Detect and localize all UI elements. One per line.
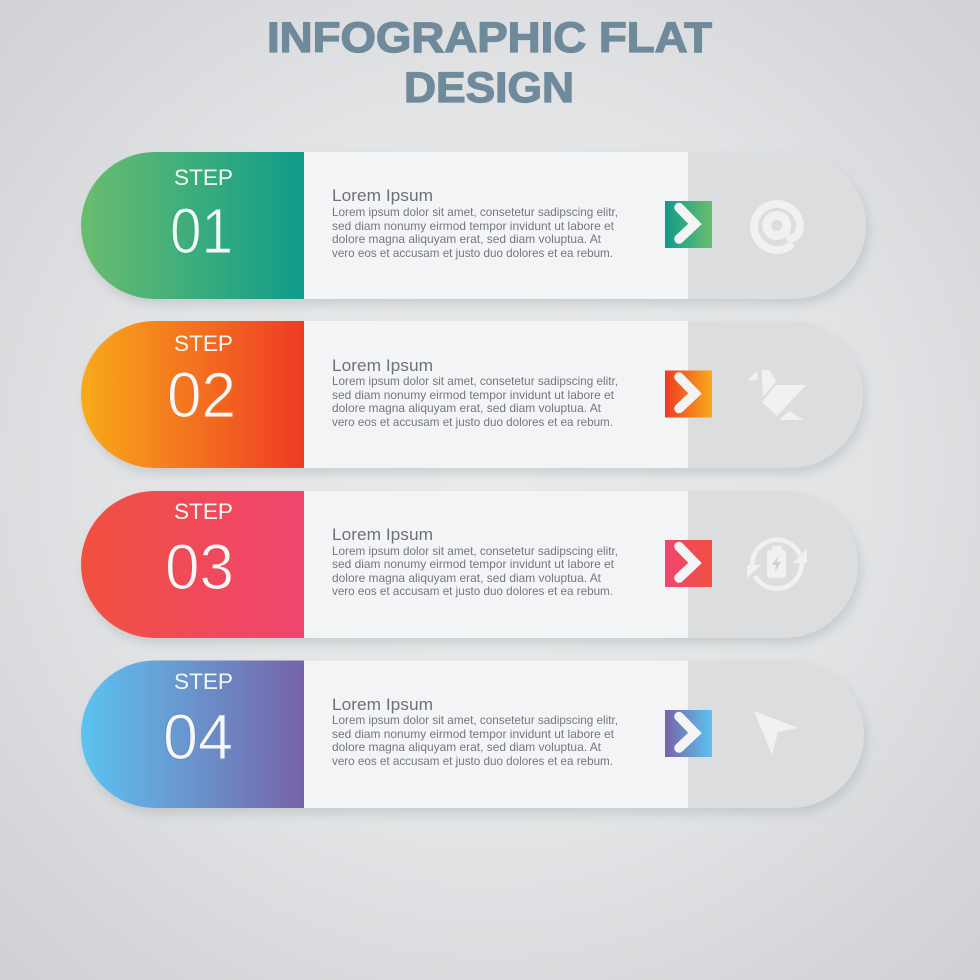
text block 03: Lorem ipsum dolor sit amet, consetetur sadipscing elitr, [332, 544, 618, 558]
panel: step 01 [81, 152, 866, 299]
colour tab 02 [81, 321, 304, 468]
text panel 01 [304, 152, 688, 299]
text block 04: Lorem ipsum dolor sit amet, consetetur sadipscing elitr, [332, 713, 618, 727]
text block 04: vero eos et accusam et justo duo dolores et ea rebum. [332, 754, 613, 768]
step label 02: STEP [174, 331, 233, 356]
colour tab 03 [81, 491, 304, 638]
colour tab 01 [81, 152, 304, 299]
title [267, 14, 712, 112]
text block 01: dolore magna aliquyam erat, sed diam voluptua. At [332, 232, 602, 246]
text block 02: Lorem ipsum dolor sit amet, consetetur sadipscing elitr, [332, 374, 618, 388]
text block 01: Lorem ipsum dolor sit amet, consetetur sadipscing elitr, [332, 205, 618, 219]
text block 02 [332, 356, 618, 429]
panel: step 02 [81, 321, 863, 468]
text block 02: sed diam nonumy eirmod tempor invidunt ut labore et [332, 388, 615, 402]
step number 01: 01 [170, 195, 233, 267]
text panel 03 [304, 491, 688, 638]
text block 03: dolore magna aliquyam erat, sed diam voluptua. At [332, 571, 602, 585]
step number 04: 04 [163, 701, 233, 773]
step number 03: 03 [165, 531, 234, 603]
text block 02: vero eos et accusam et justo duo dolores et ea rebum. [332, 415, 613, 429]
text block 02: Lorem Ipsum [332, 356, 433, 375]
text block 03: sed diam nonumy eirmod tempor invidunt ut labore et [332, 557, 615, 571]
panel: step 03 [81, 491, 858, 638]
colour tab 04 [81, 660, 304, 808]
icon: at sign [754, 204, 800, 250]
pill body 03 [81, 491, 858, 638]
text block 03: Lorem Ipsum [332, 525, 433, 544]
text panel 04 [304, 660, 688, 808]
icon: battery recharge [747, 540, 807, 589]
arrow 03 [665, 540, 712, 587]
text panel 02 [304, 321, 688, 468]
pill body 04 [81, 660, 864, 808]
step label 03: STEP [174, 499, 233, 524]
icon: navigation cursor [754, 711, 798, 755]
text block 03: vero eos et accusam et justo duo dolores et ea rebum. [332, 584, 613, 598]
step label 04: STEP [174, 669, 233, 694]
title: DESIGN [404, 64, 574, 112]
text block 04: Lorem Ipsum [332, 695, 433, 714]
text block 04: sed diam nonumy eirmod tempor invidunt ut labore et [332, 727, 615, 741]
text block 02: dolore magna aliquyam erat, sed diam voluptua. At [332, 401, 602, 415]
arrow 01 [665, 201, 712, 248]
pill body 02 [81, 321, 863, 468]
step number 02: 02 [167, 359, 236, 431]
pill body 01 [81, 152, 866, 299]
arrow 04 [665, 710, 712, 757]
text block 03 [332, 525, 618, 598]
text block 01 [332, 186, 618, 260]
step label 01: STEP [174, 165, 233, 190]
text block 01: Lorem Ipsum [332, 186, 433, 205]
text block 01: vero eos et accusam et justo duo dolores et ea rebum. [332, 246, 613, 260]
text block 04 [332, 695, 618, 768]
text block 01: sed diam nonumy eirmod tempor invidunt ut labore et [332, 219, 615, 233]
title: INFOGRAPHIC FLAT [267, 14, 712, 62]
text block 04: dolore magna aliquyam erat, sed diam voluptua. At [332, 740, 602, 754]
arrow 02 [665, 370, 712, 418]
panel: step 04 [81, 660, 864, 808]
icon: origami bird [747, 370, 806, 420]
